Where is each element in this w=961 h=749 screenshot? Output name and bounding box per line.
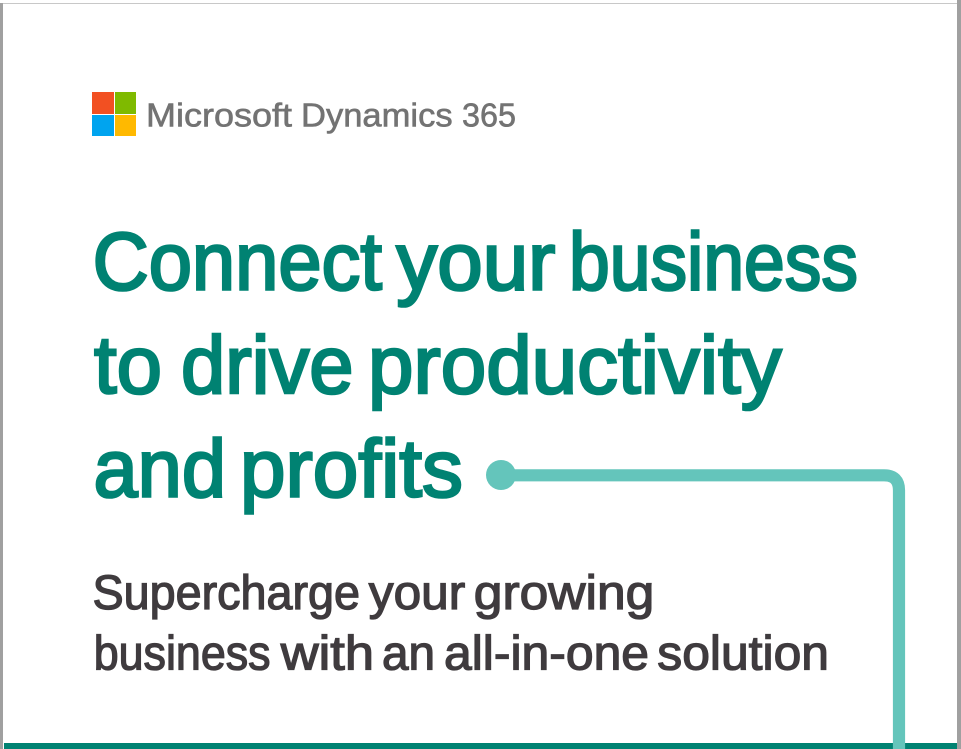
icon: Microsoft four-square logo — [92, 92, 136, 136]
title: and — [94, 423, 226, 514]
subtitle: your — [369, 567, 465, 620]
subtitle — [92, 567, 829, 680]
subtitle: an — [382, 628, 435, 680]
title: productivity — [368, 320, 782, 411]
title: your — [396, 216, 555, 307]
subtitle: growing — [474, 567, 654, 620]
title: profits — [240, 423, 463, 514]
footer band — [4, 743, 957, 749]
subtitle: solution — [657, 628, 829, 680]
title: business — [569, 216, 858, 307]
logo wordmark: Microsoft — [146, 96, 292, 134]
title: Connect — [93, 216, 382, 307]
title: drive — [181, 320, 354, 411]
logo wordmark: 365 — [462, 96, 516, 134]
subtitle: business — [94, 628, 271, 680]
subtitle: with — [280, 628, 374, 680]
logo wordmark — [146, 96, 516, 134]
subtitle: all-in-one — [444, 628, 649, 680]
connector line with dot — [486, 460, 899, 749]
title — [93, 216, 858, 514]
logo wordmark: Dynamics — [301, 96, 453, 134]
logo: Microsoft Dynamics 365 — [92, 92, 516, 136]
subtitle: Supercharge — [92, 567, 360, 620]
title: to — [94, 320, 162, 411]
